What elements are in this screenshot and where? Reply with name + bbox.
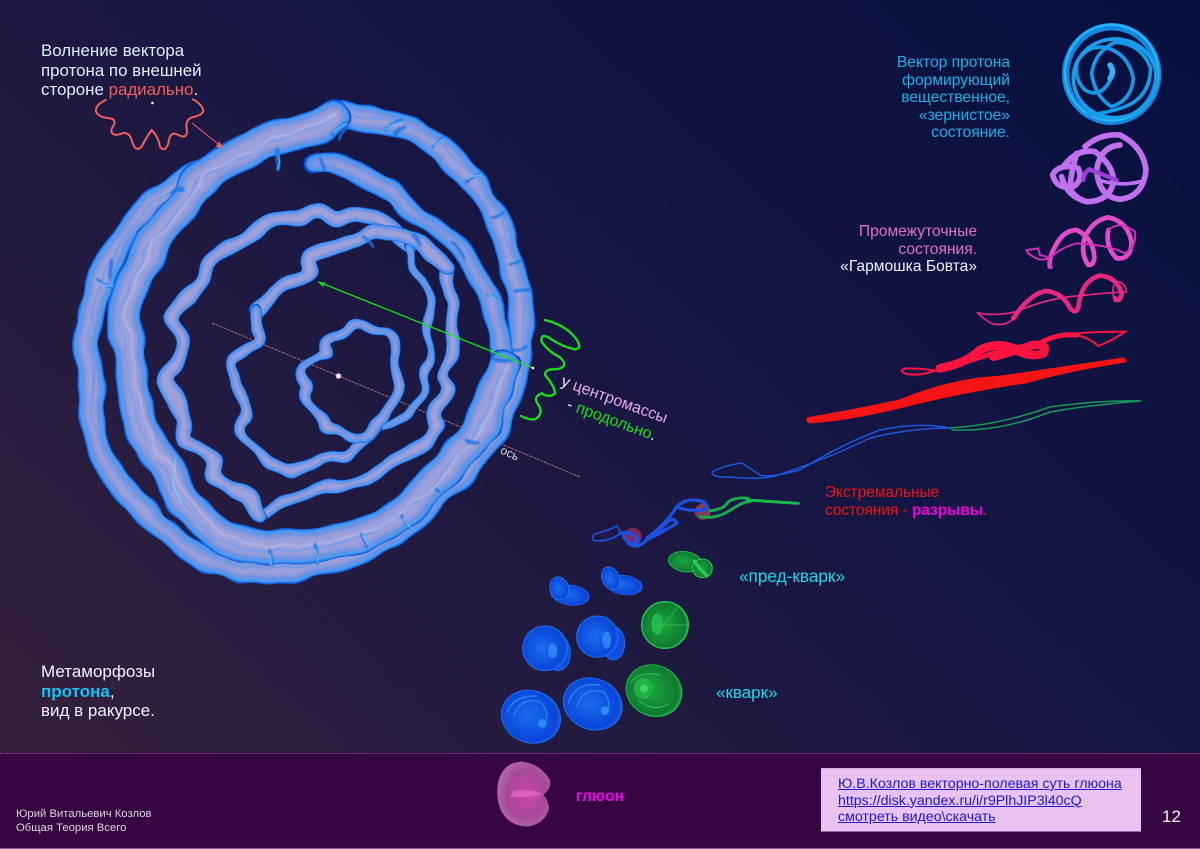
- heading: radial wave note: [41, 41, 202, 99]
- icon: blue quark middle left: [523, 626, 570, 671]
- innermost loop: [300, 324, 397, 439]
- text: proton vector state: формирующий: [902, 72, 1010, 88]
- icon: blue-green thin filament: [712, 401, 1141, 478]
- link box: [821, 768, 1141, 832]
- arrow: red to outer ring: [192, 123, 223, 148]
- icon: red stretched loop state: [902, 332, 1125, 375]
- text: metamorphoses caption: протона,: [41, 682, 115, 700]
- text: proton vector state: состояние.: [931, 124, 1010, 141]
- text: extreme states: [825, 484, 987, 518]
- axis line: [212, 323, 580, 477]
- text: extreme states: Экстремальные: [825, 484, 939, 501]
- text: intermediate states: состояния.: [898, 240, 977, 258]
- third turn thick part: [123, 117, 503, 549]
- icon: radial red wave: [96, 99, 203, 149]
- link text: Ю.В.Козлов векторно-полевая суть глюона: [838, 776, 1122, 792]
- text: proton vector state: вещественное,: [901, 89, 1010, 106]
- quarks: [494, 549, 712, 751]
- second turn outer: [258, 267, 454, 515]
- text: intermediate states: «Гармошка Бовта»: [840, 258, 977, 275]
- icon: red rupture filament: [806, 357, 1126, 423]
- inner connecting turn: [377, 247, 432, 426]
- heading: radial wave note: протона по внешней: [41, 60, 202, 80]
- text: proton vector state: «зернистое»: [919, 106, 1010, 124]
- icon: blue quark bottom right: [555, 669, 630, 739]
- text: metamorphoses caption: вид в ракурсе.: [41, 701, 155, 720]
- third turn thin part: [313, 162, 503, 367]
- icon: blue pre-quark 1: [547, 574, 591, 608]
- link text: смотреть видео\скачать: [838, 809, 996, 825]
- footer band: [0, 753, 1200, 849]
- text: axis label: ось: [498, 443, 521, 463]
- icon: blue pre-quark 2: [598, 564, 643, 597]
- link text: [838, 776, 1122, 825]
- icon: longitudinal green wave: [521, 320, 579, 419]
- icon: green pre-quark: [667, 549, 712, 578]
- icon: broken vector with gluons: [592, 498, 798, 546]
- thick turn highlight: [120, 120, 500, 552]
- icon: gluon: [497, 762, 550, 827]
- fold details on tube: [98, 120, 528, 565]
- text: proton vector state: Вектор протона: [897, 54, 1010, 71]
- text: intermediate states: Промежуточные: [859, 223, 977, 240]
- text: near centre of mass: - продольно.: [565, 396, 658, 444]
- text: author: Юрий Витальевич Козлов: [16, 808, 152, 820]
- icon: green quark bottom: [618, 656, 690, 726]
- outer turn: [86, 113, 522, 571]
- heading: radial wave note: Волнение вектора: [41, 41, 184, 60]
- thick turn second highlight: [127, 115, 507, 547]
- icon: violet knot state: [1053, 135, 1146, 202]
- text: author: Общая Теория Всего: [16, 822, 126, 834]
- text: metamorphoses caption: Метаморфозы: [41, 662, 155, 681]
- icon: blue coil state: [1065, 25, 1158, 121]
- text: author: [16, 808, 152, 834]
- icon: crimson loop state: [977, 276, 1127, 324]
- icon: pink accordion state: [1027, 217, 1135, 268]
- text: near centre of mass: у центромассы: [559, 373, 670, 427]
- page number: 12: [1162, 807, 1181, 826]
- icon: blue quark middle right: [577, 616, 625, 660]
- outer turn highlight: [88, 111, 524, 569]
- text: gluon label: глюон: [576, 788, 624, 805]
- text: metamorphoses caption: [41, 662, 155, 720]
- icon: blue quark bottom left: [494, 682, 568, 751]
- text: pre-quark: «пред-кварк»: [739, 566, 845, 586]
- dot above wave: [151, 102, 154, 104]
- text: extreme states: состояния - разрывы.: [825, 502, 987, 518]
- text: proton vector state: [897, 54, 1010, 141]
- text: quark: «кварк»: [716, 683, 778, 702]
- centre of mass dot: [336, 374, 341, 378]
- heading: radial wave note: стороне радиально.: [41, 80, 198, 99]
- spiral proton vector: [86, 111, 528, 571]
- link text: https://disk.yandex.ru/i/r9PlhJIP3l40cQ: [838, 793, 1082, 809]
- icon: green quark middle: [642, 602, 688, 648]
- text: intermediate states: [840, 223, 977, 275]
- arrow: green: [318, 282, 534, 369]
